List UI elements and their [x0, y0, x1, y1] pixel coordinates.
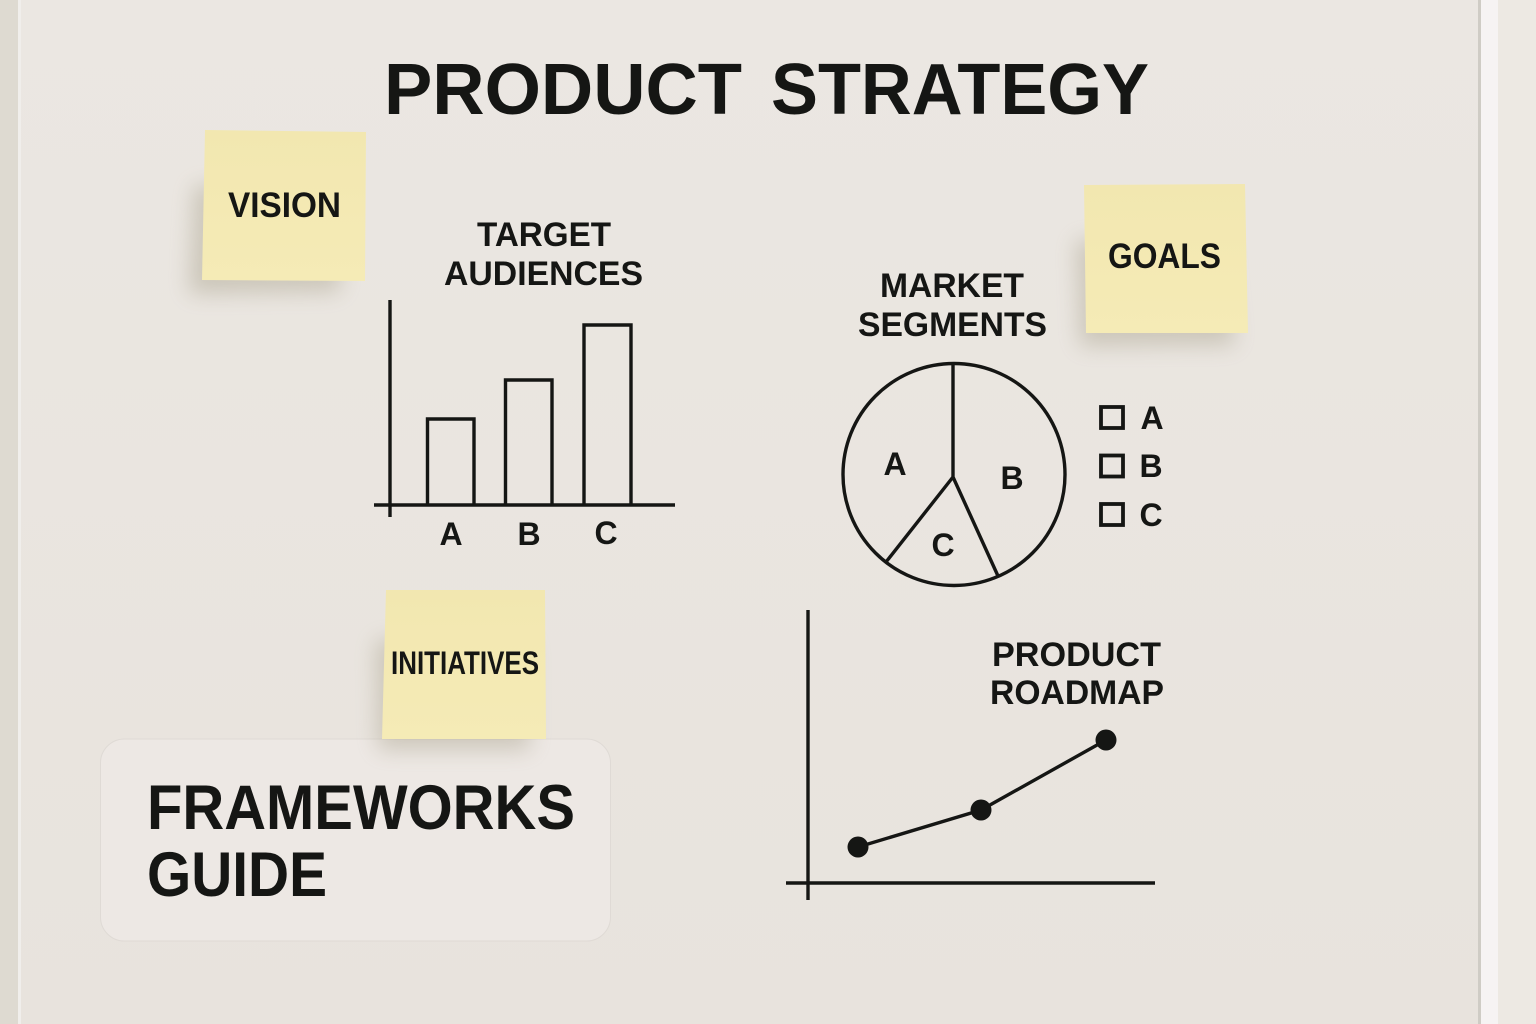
- panel: frameworks guide: FRAMEWORKS: [147, 773, 575, 843]
- line chart: product roadmap: [786, 610, 1155, 900]
- heading: product roadmap: ROADMAP: [990, 674, 1164, 712]
- sticky note: goals: [1076, 184, 1248, 346]
- pie chart: market segments: A: [883, 446, 907, 482]
- bars: [428, 325, 631, 505]
- title: PRODUCT: [384, 50, 742, 130]
- pie legend: A: [1140, 400, 1164, 436]
- pie legend: C: [1139, 497, 1163, 533]
- heading: target audiences: [444, 216, 643, 293]
- heading: product roadmap: PRODUCT: [992, 636, 1161, 674]
- sticky note: vision: [189, 130, 366, 294]
- panel: frameworks guide: [100, 739, 610, 941]
- bar labels: A: [439, 516, 463, 552]
- pie chart: market segments: C: [931, 527, 955, 563]
- bar labels: C: [594, 515, 618, 551]
- title: STRATEGY: [771, 50, 1149, 130]
- sticky note: initiatives: INITIATIVES: [391, 645, 539, 681]
- bar chart: target audiences: [374, 300, 675, 552]
- sticky note: initiatives: [376, 590, 546, 750]
- bar labels: [439, 515, 618, 552]
- heading: target audiences: AUDIENCES: [444, 255, 643, 293]
- sticky note: vision: VISION: [228, 186, 341, 225]
- pie chart: market segments: [843, 363, 1065, 586]
- pie legend: [1101, 400, 1164, 533]
- heading: target audiences: TARGET: [477, 216, 611, 254]
- pie legend: B: [1139, 448, 1163, 484]
- heading: market segments: MARKET: [880, 267, 1024, 305]
- title: [384, 50, 1149, 130]
- panel: frameworks guide: GUIDE: [147, 840, 327, 910]
- axes: [374, 300, 675, 517]
- data points: [848, 730, 1116, 858]
- heading: product roadmap: [990, 636, 1164, 712]
- heading: market segments: [858, 267, 1047, 344]
- trend line: [858, 740, 1106, 847]
- heading: market segments: SEGMENTS: [858, 306, 1047, 344]
- bar labels: B: [517, 516, 541, 552]
- sticky note: goals: GOALS: [1108, 237, 1221, 276]
- axes: [786, 610, 1155, 900]
- pie chart: market segments: B: [1000, 460, 1024, 496]
